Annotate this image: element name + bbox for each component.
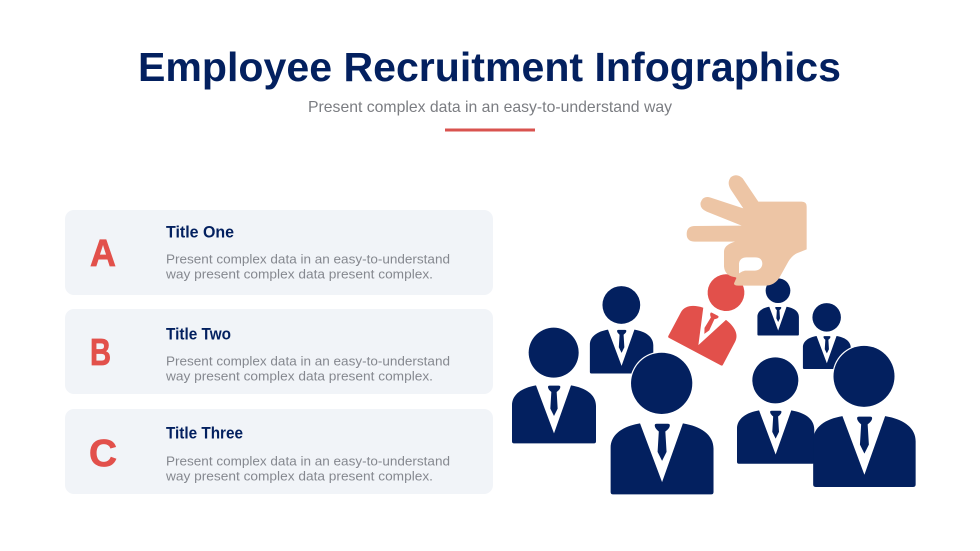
icon: person middle right bbox=[737, 357, 814, 464]
text block C: way present complex data present complex. bbox=[165, 468, 433, 484]
text block C: Present complex data in an easy-to-understand bbox=[166, 454, 450, 468]
subtitle: Present complex data in an easy-to-understand way bbox=[308, 99, 672, 116]
letter C: C bbox=[89, 433, 117, 475]
title: Employee Recruitment Infographics bbox=[138, 44, 841, 90]
icon: hand bbox=[687, 175, 807, 286]
icon: selected red person bbox=[668, 262, 762, 366]
letter B: B bbox=[90, 332, 111, 374]
title accent rule bbox=[445, 128, 535, 132]
text block C bbox=[165, 454, 450, 484]
heading: Title Two: Title Two bbox=[166, 324, 231, 344]
icon: person back far right bbox=[803, 303, 851, 369]
text block B: way present complex data present complex. bbox=[165, 368, 433, 384]
text block B: Present complex data in an easy-to-understand bbox=[166, 354, 450, 368]
text block A: Present complex data in an easy-to-understand bbox=[166, 252, 450, 266]
icon: small person back right bbox=[757, 278, 799, 335]
icon: person far left bbox=[512, 328, 596, 443]
icon: person back left bbox=[590, 286, 653, 373]
text block A: way present complex data present complex. bbox=[165, 266, 433, 282]
panel: card A bbox=[65, 210, 493, 295]
text block B bbox=[165, 354, 450, 384]
icon: person front right bbox=[813, 345, 916, 487]
panel: card B bbox=[65, 309, 493, 394]
text block A bbox=[165, 252, 450, 282]
heading: Title One: Title One bbox=[166, 222, 234, 242]
panel: card C bbox=[65, 409, 493, 494]
icon: person front centre bbox=[611, 351, 714, 494]
illustration: hand picking a candidate from a crowd bbox=[512, 175, 916, 494]
letter A: A bbox=[90, 233, 116, 275]
heading: Title Three: Title Three bbox=[166, 424, 243, 442]
